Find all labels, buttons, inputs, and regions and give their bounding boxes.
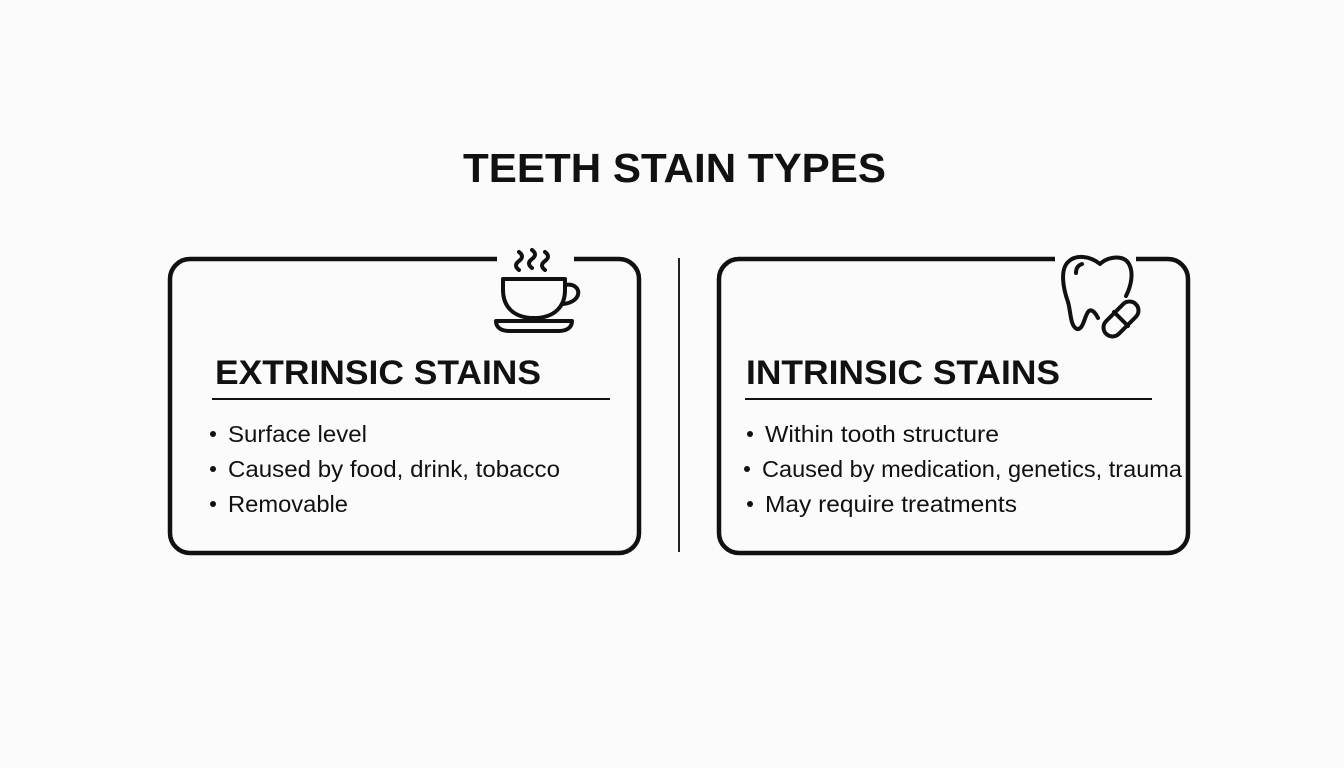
icon: tooth and pill xyxy=(1063,257,1142,340)
bullets: extrinsic: Removable xyxy=(228,491,348,517)
heading: intrinsic: INTRINSIC STAINS xyxy=(746,354,1060,392)
bullets: extrinsic: Caused by food, drink, tobacco xyxy=(228,456,560,482)
bullets: intrinsic: Caused by medication, genetics, trauma xyxy=(762,456,1182,482)
panel: intrinsic xyxy=(719,257,1188,553)
heading: extrinsic: EXTRINSIC STAINS xyxy=(215,354,541,392)
icon: coffee cup xyxy=(496,250,578,331)
bullets: extrinsic xyxy=(210,421,560,517)
title: TEETH STAIN TYPES xyxy=(463,145,886,191)
panel: extrinsic xyxy=(170,250,639,553)
bullets: intrinsic: Within tooth structure xyxy=(765,421,999,447)
bullets: extrinsic: Surface level xyxy=(228,421,367,447)
bullets: intrinsic: May require treatments xyxy=(765,491,1017,517)
divider xyxy=(678,258,680,552)
bullets: intrinsic xyxy=(744,421,1182,517)
